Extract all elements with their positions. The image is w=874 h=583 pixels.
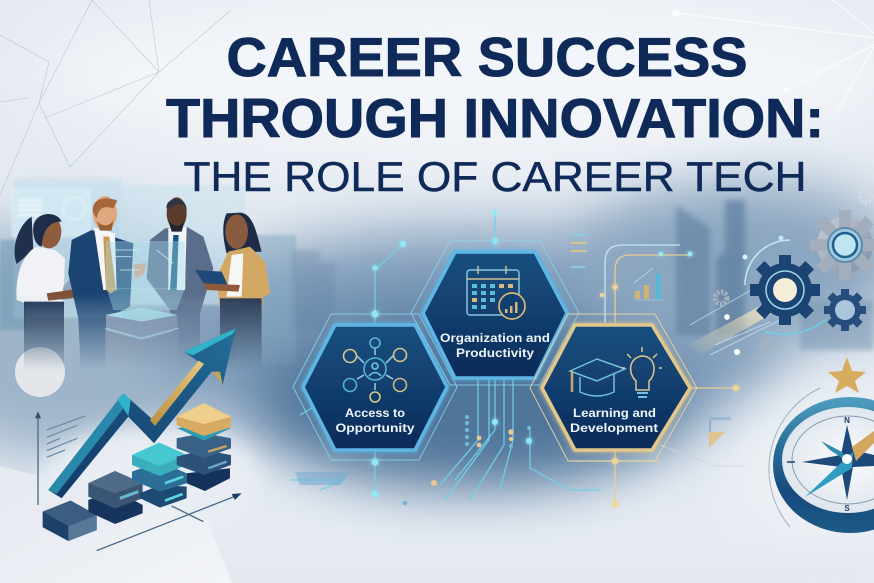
circuit lines (290, 210, 600, 500)
gear: small dark (824, 289, 866, 331)
stack: two blocks (88, 471, 143, 524)
growth arrow (48, 328, 236, 498)
compass star (828, 357, 866, 393)
light streaks to gears (688, 236, 825, 355)
icon: graduation cap (570, 359, 625, 396)
circuit nodes (372, 210, 532, 497)
compass: S (844, 504, 850, 513)
hexagon: access to opportunity (293, 314, 457, 460)
gear: large dark (750, 255, 820, 325)
hexagon: organization and productivity: Productivity (456, 346, 534, 360)
hexagon: learning and development (530, 314, 697, 461)
icon: light bulb (622, 347, 662, 397)
subtitle: THE ROLE OF CAREER TECH (184, 153, 806, 200)
hexagon: learning and development: Learning and (573, 406, 656, 420)
hexagon: access to opportunity: Access to (345, 406, 405, 420)
person: man in navy suit (68, 196, 147, 365)
list icon (571, 235, 587, 267)
gold circuit lines (570, 245, 745, 505)
stack: three blocks (132, 443, 187, 508)
city skyline right (676, 200, 874, 350)
title line 1: CAREER SUCCESS (226, 26, 748, 88)
holographic screens behind people (0, 178, 296, 365)
person: man in grey suit (146, 197, 214, 359)
left city ghost (292, 250, 335, 330)
bottom-left white plane (0, 466, 232, 583)
title line 2: THROUGH INNOVATION: (166, 87, 824, 149)
hexagon: learning and development: Development (570, 421, 658, 435)
hexagon: access to opportunity: Opportunity (336, 421, 415, 435)
compass: N (844, 416, 850, 425)
person: woman in tan blazer (195, 212, 270, 364)
small gears (715, 190, 872, 350)
decorative network lines top (0, 0, 231, 195)
stack: single block (43, 501, 97, 541)
gear: large steel (810, 210, 874, 280)
small doc icon (709, 417, 731, 448)
axis arrows (38, 417, 238, 551)
person: woman in white blouse (14, 214, 74, 367)
icon: people network (344, 338, 406, 402)
holographic pedestal (105, 308, 178, 362)
holographic panel (107, 242, 185, 310)
stacked bars (35, 403, 242, 551)
compass (769, 388, 874, 533)
hexagon: organization and productivity: Organization and (440, 331, 550, 345)
people group (14, 196, 270, 367)
hexagon: organization and productivity (411, 241, 579, 385)
mini bar chart (634, 268, 664, 300)
icon: calendar (467, 266, 525, 319)
stack: tall blocks with gold cap (177, 403, 231, 491)
